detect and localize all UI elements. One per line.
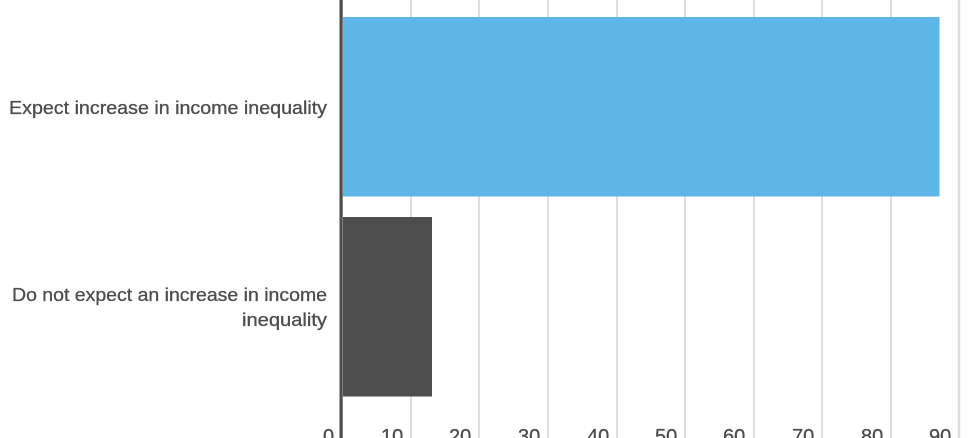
category label: do not expect increase: Do not expect an increase in income (12, 285, 327, 305)
horizontal axis tick labels (323, 426, 951, 438)
bar: expect increase (343, 17, 940, 196)
category label: do not expect increase: inequality (242, 310, 327, 330)
category label: expect increase: Expect increase in income inequality (9, 98, 327, 118)
vertical axis line (340, 0, 343, 438)
category label: do not expect increase (12, 285, 327, 330)
bar: do not expect increase (343, 217, 432, 396)
